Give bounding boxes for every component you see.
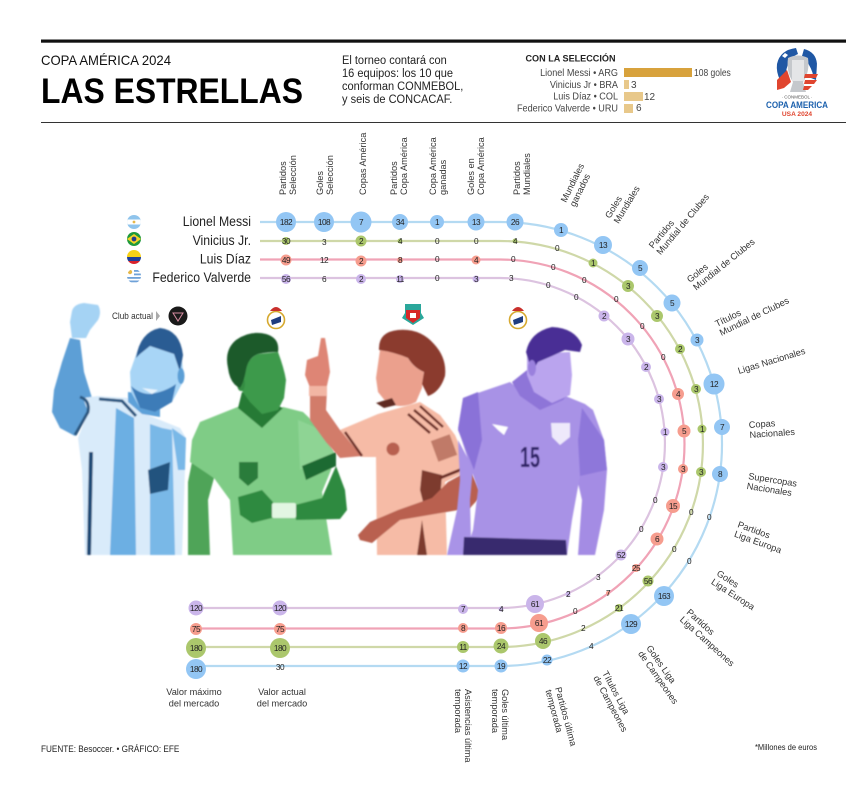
nodes: Messi: 26	[511, 217, 520, 227]
axis labels around the arc: temporada	[490, 689, 500, 734]
axis labels around the arc: del mercado	[169, 698, 219, 708]
nodes: Federico Valverde: 0	[546, 280, 551, 290]
axis labels around the arc: Selección	[288, 155, 298, 195]
nodes: Luis Díaz: 49	[282, 255, 291, 265]
nodes: Vinicius: 30	[282, 236, 291, 246]
axis labels around the arc: Asistencias última	[463, 689, 473, 763]
axis labels around the arc: de Campeones	[636, 649, 680, 706]
axis labels around the arc: Liga Europa	[709, 577, 757, 613]
nodes: Federico Valverde: 120	[274, 603, 287, 613]
axis labels around the arc: Valor actual	[258, 687, 306, 697]
nodes: Luis Díaz: 25	[632, 563, 641, 573]
nodes: Luis Díaz	[190, 254, 690, 635]
intro text: 16 equipos: los 10 que	[342, 68, 453, 80]
units note: *Millones de euros	[755, 742, 817, 752]
nodes: Luis Díaz: 0	[582, 275, 587, 285]
nodes: Luis Díaz: 2	[359, 256, 364, 266]
club: Inter Miami	[112, 306, 188, 326]
nodes: Vinicius: 1	[591, 258, 596, 268]
axis labels around the arc: ganadas	[438, 159, 448, 195]
nodes: Vinicius: 21	[615, 603, 624, 613]
club: Liverpool	[402, 304, 424, 325]
axis labels around the arc: Liga Europa	[733, 529, 784, 556]
nodes: Vinicius: 0	[689, 507, 694, 517]
photo: Federico Valverde	[447, 307, 607, 555]
axis labels around the arc: temporada	[543, 689, 565, 734]
axis labels around the arc: Partidos	[278, 161, 288, 195]
nodes: Federico Valverde: 3	[509, 273, 514, 283]
nodes: Messi: 182	[280, 217, 293, 227]
axis labels around the arc: del mercado	[257, 698, 307, 708]
bar chart: goles con la selección: CON LA SELECCIÓN	[526, 52, 616, 64]
nodes: Messi: 22	[543, 655, 552, 665]
nodes: Messi: 5	[638, 263, 643, 273]
photo: Federico Valverde: 15	[520, 442, 540, 474]
nodes: Luis Díaz: 0	[551, 262, 556, 272]
bar chart: goles con la selección	[517, 52, 731, 115]
nodes: Vinicius: 0	[435, 236, 440, 246]
nodes: Vinicius: 3	[322, 237, 327, 247]
nodes: Messi: 1	[435, 217, 440, 227]
nodes: Luis Díaz: 0	[573, 606, 578, 616]
nodes: Federico Valverde: 1	[663, 427, 668, 437]
nodes: Luis Díaz: 61	[535, 618, 544, 628]
axis labels around the arc	[166, 132, 807, 763]
nodes: Messi: 34	[396, 217, 405, 227]
nodes: Federico Valverde: 2	[602, 311, 607, 321]
nodes: Federico Valverde: 6	[322, 274, 327, 284]
nodes: Vinicius: 24	[497, 641, 506, 651]
nodes: Federico Valverde: 3	[657, 394, 662, 404]
logo: Copa América USA 2024: COPA AMERICA	[766, 100, 828, 110]
player names: Lionel Messi	[183, 213, 251, 229]
nodes: Federico Valverde: 2	[644, 362, 649, 372]
nodes: Federico Valverde: 3	[596, 572, 601, 582]
nodes: Messi: 8	[718, 469, 723, 479]
axis labels around the arc: Goles	[715, 568, 741, 590]
nodes: Federico Valverde: 52	[617, 550, 626, 560]
nodes: Vinicius: 2	[678, 344, 683, 354]
nodes: Messi: 0	[707, 512, 712, 522]
axis labels around the arc: Títulos Liga	[600, 669, 632, 717]
nodes: Messi: 0	[687, 556, 692, 566]
nodes: Federico Valverde: 3	[626, 334, 631, 344]
nodes: Federico Valverde: 7	[461, 604, 466, 614]
nodes: Federico Valverde: 0	[574, 292, 579, 302]
nodes: Luis Díaz: 0	[511, 254, 516, 264]
photo: Vinicius Jr.	[188, 307, 347, 555]
flags	[127, 215, 141, 282]
nodes: Luis Díaz: 16	[497, 623, 506, 633]
header block	[41, 40, 846, 123]
nodes: Messi: 7	[720, 422, 725, 432]
club: Real Madrid	[510, 307, 526, 328]
nodes: Vinicius: 0	[555, 243, 560, 253]
axis labels around the arc: Supercopas	[748, 471, 798, 489]
axis labels around the arc: Copa América	[399, 136, 409, 195]
bar chart: goles con la selección: 108 goles	[694, 67, 731, 78]
title: LAS ESTRELLAS	[41, 72, 303, 111]
intro text: conforman CONMEBOL,	[342, 81, 463, 93]
photo: Luis Díaz	[305, 304, 482, 555]
bar chart: goles con la selección: Lionel Messi • ARG	[540, 68, 618, 79]
flag: Uruguay	[127, 270, 141, 282]
nodes: Luis Díaz: 4	[474, 255, 479, 265]
nodes: Vinicius: 180	[274, 643, 287, 653]
logo: Copa América USA 2024	[766, 48, 828, 118]
nodes: Vinicius: 0	[474, 236, 479, 246]
axis labels around the arc: Títulos	[713, 308, 743, 329]
axis labels around the arc: Mundial de Clubes	[655, 192, 711, 257]
nodes: Messi: 129	[625, 619, 638, 629]
nodes: Federico Valverde: 0	[653, 495, 658, 505]
axis labels around the arc: Copa América	[428, 136, 438, 195]
nodes: Vinicius	[186, 236, 706, 658]
nodes: Federico Valverde: 0	[639, 524, 644, 534]
nodes: Luis Díaz: 6	[655, 534, 660, 544]
nodes: Federico Valverde: 4	[499, 604, 504, 614]
nodes: Federico Valverde: 2	[359, 274, 364, 284]
nodes: Messi: 30	[276, 662, 285, 672]
axis labels around the arc: Mundiales	[612, 184, 642, 225]
axis labels around the arc: Partidos	[685, 607, 717, 637]
club: Real Madrid	[268, 307, 284, 328]
source note: FUENTE: Besoccer. • GRÁFICO: EFE	[41, 744, 180, 754]
bar chart: goles con la selección: 6	[636, 103, 642, 114]
player names: Vinicius Jr.	[193, 232, 251, 248]
nodes: Vinicius: 11	[459, 642, 468, 652]
nodes: Luis Díaz: 0	[640, 321, 645, 331]
intro text: El torneo contará con	[342, 55, 447, 67]
nodes: Messi: 13	[472, 217, 481, 227]
intro text: y seis de CONCACAF.	[342, 94, 452, 106]
axis labels around the arc: de Campeones	[591, 674, 630, 734]
player names	[152, 213, 251, 285]
axis labels around the arc: Partidos	[512, 161, 522, 195]
nodes: Messi: 19	[497, 661, 506, 671]
bar chart: goles con la selección: Luis Díaz • COL	[553, 91, 618, 103]
kicker: COPA AMÉRICA 2024	[41, 52, 171, 68]
nodes: Luis Díaz: 75	[276, 624, 285, 634]
nodes: Federico Valverde: 11	[396, 274, 405, 284]
curved tracks	[196, 222, 722, 666]
nodes: Messi: 13	[599, 240, 608, 250]
axis labels around the arc: Goles Liga	[644, 643, 678, 686]
nodes: Messi	[186, 212, 730, 679]
axis labels around the arc: Nacionales	[746, 481, 793, 498]
club: Inter Miami: Club actual	[112, 311, 153, 321]
nodes: Luis Díaz: 4	[676, 389, 681, 399]
axis labels around the arc: Ligas Nacionales	[737, 346, 807, 376]
nodes: Luis Díaz: 12	[320, 255, 329, 265]
nodes: Messi: 163	[658, 591, 671, 601]
nodes: Vinicius: 56	[644, 576, 653, 586]
nodes: Messi: 12	[710, 379, 719, 389]
nodes: Luis Díaz: 0	[435, 254, 440, 264]
nodes: Luis Díaz: 5	[682, 426, 687, 436]
bar chart: goles con la selección: Vinicius Jr • BRA	[550, 80, 619, 91]
bar chart: goles con la selección: 3	[631, 80, 637, 91]
flag: Brasil	[127, 232, 141, 246]
logo: Copa América USA 2024: · CONMEBOL ·	[781, 94, 813, 100]
nodes: Federico Valverde	[188, 273, 670, 616]
nodes: Vinicius: 4	[513, 236, 518, 246]
axis labels around the arc: temporada	[453, 689, 463, 734]
nodes: Federico Valverde: 2	[566, 589, 571, 599]
axis labels around the arc: Goles última	[500, 689, 510, 741]
nodes: Luis Díaz: 7	[606, 588, 611, 598]
nodes: Vinicius: 3	[694, 384, 699, 394]
photo: Lionel Messi	[52, 303, 188, 555]
nodes: Federico Valverde: 0	[435, 273, 440, 283]
axis labels around the arc: Partidos última	[553, 686, 579, 748]
axis labels around the arc: Mundial de Clubes	[691, 236, 757, 292]
flag: Argentina	[127, 215, 141, 229]
nodes: Vinicius: 3	[626, 281, 631, 291]
axis labels around the arc: Goles en	[466, 158, 476, 195]
axis labels around the arc: Valor máximo	[166, 687, 222, 697]
nodes: Luis Díaz: 0	[661, 352, 666, 362]
nodes: Messi: 5	[670, 298, 675, 308]
player names: Luis Díaz	[200, 251, 251, 267]
axis labels around the arc: Copas	[748, 418, 776, 430]
nodes: Luis Díaz: 3	[681, 464, 686, 474]
axis labels around the arc: Liga Campeones	[678, 614, 737, 669]
axis labels around the arc: Partidos	[736, 519, 772, 541]
nodes: Vinicius: 3	[655, 311, 660, 321]
nodes: Vinicius: 4	[398, 236, 403, 246]
nodes: Vinicius: 3	[699, 467, 704, 477]
nodes: Luis Díaz: 0	[614, 294, 619, 304]
nodes: Luis Díaz: 75	[192, 624, 201, 634]
nodes: Federico Valverde: 3	[474, 274, 479, 284]
nodes: Luis Díaz: 8	[461, 623, 466, 633]
axis labels around the arc: Partidos	[389, 161, 399, 195]
nodes: Vinicius: 1	[700, 424, 705, 434]
axis labels around the arc: Copa América	[476, 136, 486, 195]
nodes: Vinicius: 46	[539, 636, 548, 646]
nodes: Federico Valverde: 3	[661, 462, 666, 472]
nodes: Messi: 4	[589, 641, 594, 651]
nodes: Messi: 180	[190, 664, 203, 674]
axis labels around the arc: Nacionales	[749, 427, 796, 440]
bar chart: goles con la selección: Federico Valverde • URU	[517, 103, 618, 115]
nodes: Messi: 7	[359, 217, 364, 227]
nodes: Vinicius: 2	[359, 236, 364, 246]
nodes: Messi: 108	[318, 217, 331, 227]
axis labels around the arc: Goles	[315, 171, 325, 195]
player names: Federico Valverde	[152, 269, 251, 285]
axis labels around the arc: Mundiales	[559, 161, 586, 204]
nodes: Federico Valverde: 61	[531, 599, 540, 609]
nodes: Luis Díaz: 15	[669, 501, 678, 511]
axis labels around the arc: Goles	[685, 261, 710, 285]
axis labels around the arc: Selección	[325, 155, 335, 195]
flag: Colombia	[127, 250, 141, 264]
axis labels around the arc: ganados	[568, 172, 592, 208]
axis labels around the arc: Mundiales	[522, 153, 532, 195]
nodes: Federico Valverde: 120	[190, 603, 203, 613]
axis labels around the arc: Mundial de Clubes	[718, 295, 791, 338]
logo: Copa América USA 2024: USA 2024	[782, 111, 812, 118]
nodes: Vinicius: 180	[190, 643, 203, 653]
nodes: Messi: 1	[559, 225, 564, 235]
nodes: Vinicius: 2	[581, 623, 586, 633]
axis labels around the arc: Partidos	[647, 218, 676, 250]
nodes: Vinicius: 0	[672, 544, 677, 554]
bar chart: goles con la selección: 12	[644, 92, 656, 103]
nodes: Federico Valverde: 56	[282, 274, 291, 284]
nodes: Messi: 12	[459, 661, 468, 671]
nodes: Messi: 3	[695, 335, 700, 345]
axis labels around the arc: Goles	[603, 194, 624, 220]
axis labels around the arc: Copas América	[358, 132, 368, 195]
nodes: Luis Díaz: 8	[398, 255, 403, 265]
